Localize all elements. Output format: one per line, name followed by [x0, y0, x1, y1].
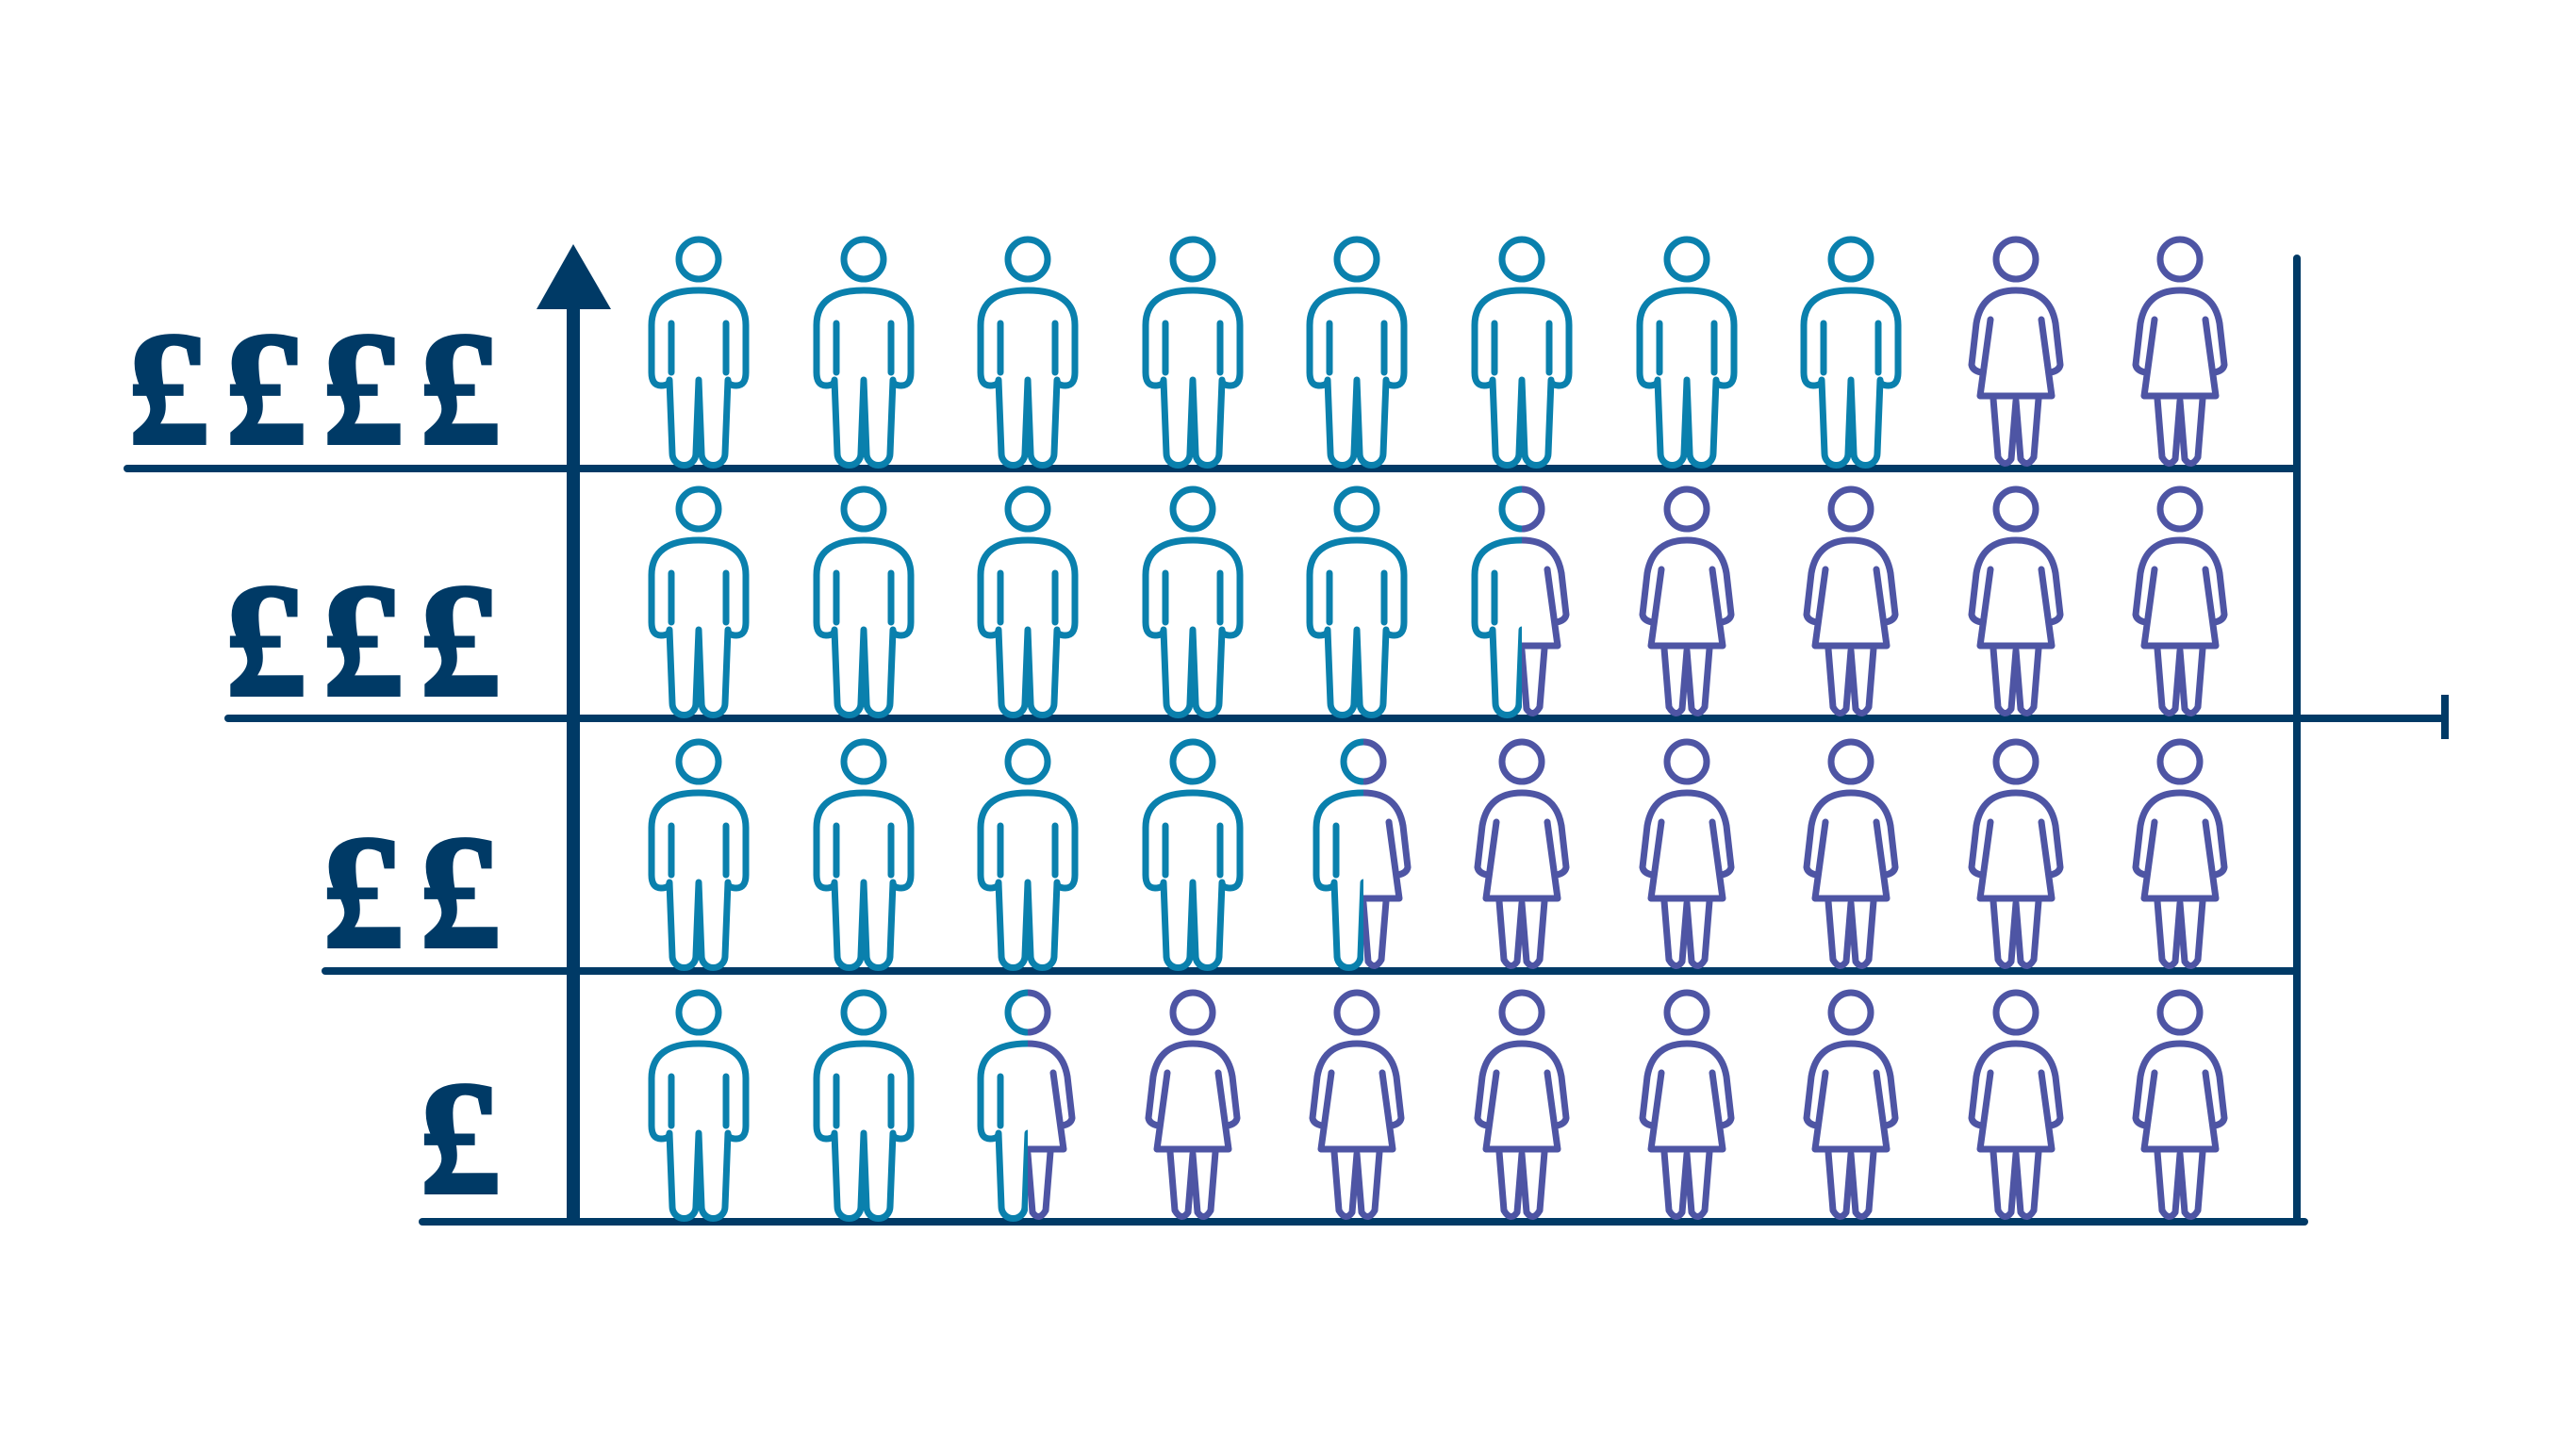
row: four pounds icons: [652, 239, 2224, 466]
row: one pound icons: [652, 993, 2224, 1218]
row: three pounds icons: [652, 489, 2224, 715]
label: four pounds: ££££: [128, 300, 517, 479]
arrow: vertical axis: [537, 244, 611, 1222]
label: three pounds: £££: [225, 551, 517, 731]
row: two pounds icons: [652, 742, 2224, 967]
pound labels: [128, 300, 517, 1228]
axis lines and grid: [127, 258, 2445, 1222]
label: one pound: £: [420, 1049, 517, 1228]
label: two pounds: ££: [322, 803, 517, 982]
